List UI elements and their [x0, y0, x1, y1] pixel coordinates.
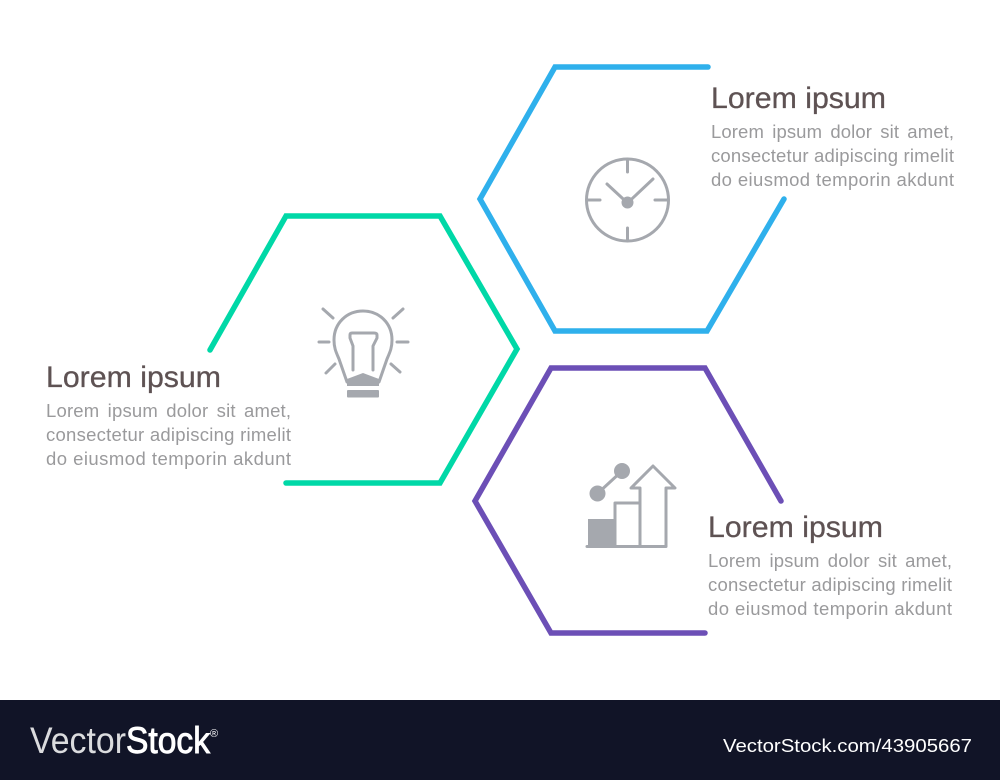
- hexagon outline: blue: [480, 67, 784, 331]
- text block: purple: [708, 511, 952, 619]
- text block: green: consectetur adipiscing rimelit: [46, 424, 291, 445]
- icon: clock: [586, 159, 668, 241]
- text block: blue: consectetur adipiscing rimelit: [711, 145, 954, 166]
- text block: purple: Lorem ipsum: [708, 511, 883, 544]
- text block: blue: Lorem ipsum: [711, 82, 886, 115]
- footer logo: [30, 720, 218, 761]
- footer bar: [0, 700, 1000, 780]
- footer image id: VectorStock.com/43905667: [723, 735, 972, 756]
- text block: green: [46, 361, 291, 469]
- text block: purple: do eiusmod temporin akdunt: [708, 598, 952, 619]
- footer logo: Vector: [30, 720, 126, 761]
- footer logo: Stock: [126, 720, 210, 761]
- text block: green: do eiusmod temporin akdunt: [46, 448, 291, 469]
- text block: blue: Lorem ipsum dolor sit amet,: [711, 121, 954, 142]
- icon: light bulb: [319, 309, 408, 398]
- hexagon outline: purple: [475, 368, 781, 633]
- text block: green: Lorem ipsum: [46, 361, 221, 394]
- text block: purple: consectetur adipiscing rimelit: [708, 574, 952, 595]
- hexagon outline: green: [210, 216, 517, 483]
- text block: blue: do eiusmod temporin akdunt: [711, 169, 954, 190]
- text block: purple: Lorem ipsum dolor sit amet,: [708, 550, 952, 571]
- text block: blue: [711, 82, 954, 190]
- footer logo: ®: [210, 728, 218, 740]
- text block: green: Lorem ipsum dolor sit amet,: [46, 400, 291, 421]
- icon: growth chart with arrow: [587, 463, 675, 546]
